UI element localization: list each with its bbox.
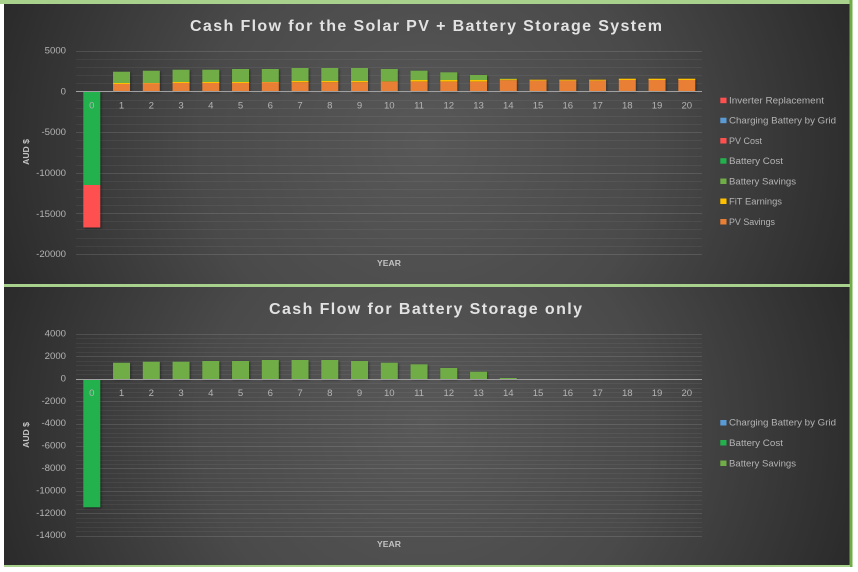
x axis title: top chart: YEAR — [377, 258, 402, 268]
x axis labels: top chart: 8 — [327, 100, 332, 112]
x axis labels: bottom chart: 7 — [297, 388, 303, 399]
x axis labels: bottom chart: 4 — [208, 388, 214, 399]
title: battery only chart: Cash Flow for Battery Storage only — [269, 301, 582, 318]
x axis labels: top chart — [89, 100, 692, 112]
x axis labels: bottom chart — [89, 388, 692, 399]
panel: Battery Storage only cash flow — [4, 287, 850, 565]
x axis labels: top chart: 1 — [119, 100, 124, 112]
x axis labels: top chart: 2 — [149, 100, 154, 112]
y axis labels: bottom chart: -4000 — [41, 418, 66, 429]
y axis labels: bottom chart: -14000 — [36, 530, 66, 541]
x axis labels: bottom chart: 10 — [384, 388, 395, 399]
x axis labels: top chart: 7 — [297, 100, 303, 112]
legend: top chart: Battery Cost — [729, 156, 783, 167]
legend: top chart: PV Cost — [729, 136, 762, 147]
x axis labels: top chart: 11 — [414, 100, 424, 112]
y axis title: bottom chart: AUD $ — [21, 422, 31, 448]
y axis labels: top chart: -15000 — [36, 209, 66, 220]
x axis labels: bottom chart: 9 — [357, 388, 362, 399]
legend: top chart: PV Savings — [729, 217, 775, 228]
y axis labels: top chart: -20000 — [36, 249, 66, 260]
x axis labels: bottom chart: 19 — [652, 388, 662, 399]
x axis labels: bottom chart: 6 — [268, 388, 273, 399]
panel: Solar PV + Battery Storage cash flow — [4, 4, 850, 284]
x axis labels: top chart: 0 — [89, 100, 94, 112]
y axis title: top chart: AUD $ — [21, 139, 31, 165]
x axis labels: top chart: 18 — [622, 100, 633, 112]
x axis labels: top chart: 10 — [384, 100, 395, 112]
x axis labels: top chart: 16 — [562, 100, 573, 112]
x axis labels: top chart: 15 — [533, 100, 543, 112]
x axis labels: bottom chart: 2 — [149, 388, 154, 399]
x axis labels: top chart: 17 — [592, 100, 603, 112]
legend: bottom chart: Battery Savings — [729, 458, 796, 469]
x axis labels: top chart: 6 — [268, 100, 273, 112]
legend: top chart: Battery Savings — [729, 176, 796, 187]
x axis labels: top chart: 13 — [473, 100, 484, 112]
x axis labels: bottom chart: 0 — [89, 388, 94, 399]
x axis labels: bottom chart: 11 — [414, 388, 424, 399]
legend: top chart: Inverter Replacement — [729, 95, 824, 106]
stacked bar chart: top chart — [83, 68, 695, 228]
x axis labels: bottom chart: 1 — [119, 388, 124, 399]
x axis labels: bottom chart: 15 — [533, 388, 543, 399]
legend: bottom chart — [720, 418, 836, 469]
x axis labels: bottom chart: 16 — [562, 388, 573, 399]
y axis labels: top chart: 5000 — [45, 46, 66, 56]
title: solar PV + battery chart: Cash Flow for the Solar PV + Battery Storage System — [190, 18, 662, 35]
bar chart: bottom chart — [83, 360, 517, 507]
y axis labels: top chart: 0 — [61, 86, 66, 98]
y axis labels: bottom chart: 4000 — [45, 328, 66, 340]
legend: bottom chart: Charging Battery by Grid — [729, 418, 836, 429]
x axis labels: bottom chart: 14 — [503, 388, 514, 399]
x axis labels: bottom chart: 13 — [473, 388, 484, 399]
x axis labels: top chart: 9 — [357, 100, 362, 112]
legend: bottom chart: Battery Cost — [729, 438, 783, 449]
y axis labels: bottom chart: -12000 — [36, 508, 66, 519]
y axis labels: bottom chart: 0 — [61, 374, 66, 384]
x axis labels: bottom chart: 5 — [238, 388, 243, 399]
x axis labels: top chart: 14 — [503, 100, 514, 112]
x axis labels: bottom chart: 12 — [443, 388, 454, 399]
x axis labels: top chart: 4 — [208, 100, 214, 112]
y axis labels: bottom chart: -6000 — [41, 440, 66, 452]
y axis labels: bottom chart: -2000 — [41, 396, 66, 407]
x axis labels: bottom chart: 18 — [622, 388, 633, 399]
legend: top chart — [720, 95, 836, 228]
y axis labels: bottom chart: 2000 — [45, 351, 66, 362]
x axis labels: bottom chart: 20 — [681, 388, 692, 399]
legend: top chart: Charging Battery by Grid — [729, 115, 836, 126]
x axis labels: top chart: 19 — [652, 100, 662, 112]
x axis labels: top chart: 12 — [443, 100, 454, 112]
x axis title: bottom chart: YEAR — [377, 539, 402, 549]
legend: top chart: FiT Earnings — [729, 196, 782, 207]
x axis labels: bottom chart: 17 — [592, 388, 603, 399]
y axis labels: top chart — [36, 46, 66, 260]
y axis labels: top chart: -10000 — [36, 168, 66, 179]
x axis labels: top chart: 5 — [238, 100, 243, 112]
y axis labels: top chart: -5000 — [41, 127, 66, 138]
y axis labels: bottom chart: -10000 — [36, 486, 66, 496]
x axis labels: top chart: 20 — [681, 100, 692, 112]
y axis labels: bottom chart — [36, 328, 66, 541]
x axis labels: bottom chart: 8 — [327, 388, 332, 399]
x axis labels: top chart: 3 — [178, 100, 184, 112]
y axis labels: bottom chart: -8000 — [41, 463, 66, 474]
x axis labels: bottom chart: 3 — [178, 388, 184, 399]
